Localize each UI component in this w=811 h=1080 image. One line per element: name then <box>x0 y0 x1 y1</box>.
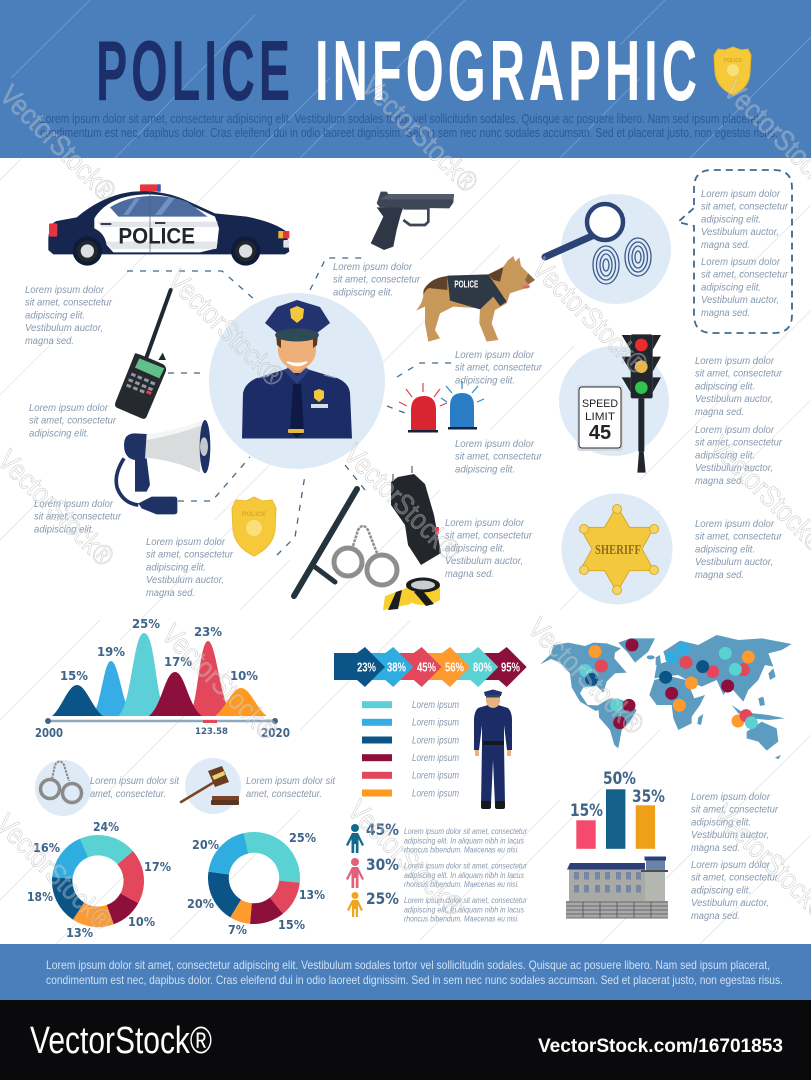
stat: 45 percent: 45% <box>366 820 399 839</box>
stat: 30 percent: rhoncus bibendum. Maecenas eu nisi. <box>404 879 519 889</box>
text: traffic notes: Vestibulum auctor, <box>695 462 773 474</box>
icon: speed limit and traffic light: LIMIT <box>585 411 615 423</box>
icon: sirens <box>399 381 484 432</box>
icon: header gold badge: POLICE <box>724 58 743 64</box>
text: siren top note: sit amet, consectetur <box>455 362 542 374</box>
icon: magnifier and fingerprints <box>545 194 671 304</box>
text: gavel caption: Lorem ipsum dolor sit <box>246 775 336 787</box>
stat: 30 percent: adipiscing elit. In aliquam nibh in lacus <box>404 870 525 880</box>
text: gun note: adipiscing elit. <box>333 286 393 298</box>
text: radio note: sit amet, consectetur <box>29 415 116 427</box>
chart: donut one: 16% <box>33 840 60 855</box>
chart: area peaks timeline: 2000 <box>35 725 63 740</box>
text: gun note: Lorem ipsum dolor <box>333 261 412 273</box>
chart: donut one <box>27 819 171 940</box>
text: radio note <box>29 402 116 439</box>
text: siren bottom note <box>455 438 542 475</box>
text: megaphone note <box>34 498 121 535</box>
chart: area peaks timeline: 123.58 <box>195 727 228 737</box>
title <box>96 24 701 119</box>
text: siren top note <box>455 349 542 386</box>
callout: dashed speech bubble: sit amet, consectetur <box>701 201 788 213</box>
text: taser note: Lorem ipsum dolor <box>445 517 524 529</box>
icon: sheriff star: SHERIFF <box>595 543 641 558</box>
chart: area peaks timeline: 23% <box>194 624 222 639</box>
callout: dashed speech bubble: Lorem ipsum dolor <box>701 256 780 268</box>
legend <box>362 699 459 799</box>
text: siren bottom note: sit amet, consectetur <box>455 451 542 463</box>
text: siren bottom note: Lorem ipsum dolor <box>455 438 534 450</box>
icon: police car: POLICE <box>118 224 195 249</box>
watermark marks: VectorStock® <box>525 252 654 381</box>
text: traffic notes: adipiscing elit. <box>695 380 755 392</box>
connectors <box>127 258 457 555</box>
callout: dashed speech bubble: magna sed. <box>701 307 750 319</box>
chart: percentage arrows: 56% <box>445 660 464 674</box>
legend: Lorem ipsum <box>412 717 459 729</box>
text: traffic notes: sit amet, consectetur <box>695 437 782 449</box>
text: prison notes: Lorem ipsum dolor <box>691 859 770 871</box>
text: prison notes: sit amet, consectetur <box>691 804 778 816</box>
chart: area peaks timeline: 2020 <box>261 725 290 740</box>
text: taser note <box>445 517 532 580</box>
legend: Lorem ipsum <box>412 752 459 764</box>
watermark marks: VectorStock® <box>155 618 284 747</box>
icon: standing officer <box>474 690 512 809</box>
icon: police dog <box>416 256 535 342</box>
text: prison notes: sit amet, consectetur <box>691 872 778 884</box>
text: badge note: adipiscing elit. <box>146 561 206 573</box>
text: prison notes: Vestibulum auctor, <box>691 829 769 841</box>
header text <box>40 112 778 140</box>
chart: percentage arrows: 95% <box>501 660 520 674</box>
icon: gold police badge <box>232 497 276 556</box>
text: siren top note: adipiscing elit. <box>455 374 515 386</box>
icon: caution tape <box>383 578 440 610</box>
legend: Lorem ipsum <box>412 699 459 711</box>
stat: 45 percent: Lorem ipsum dolor sit amet, consectetur <box>404 826 528 836</box>
chart: donut two: 20% <box>187 896 214 911</box>
callout: dashed speech bubble: adipiscing elit. <box>701 281 761 293</box>
chart: donut one: 10% <box>128 914 155 929</box>
text: taser note: sit amet, consectetur <box>445 530 532 542</box>
icon: police car <box>48 184 289 266</box>
chart: donut one: 18% <box>27 889 53 904</box>
text: car note: sit amet, consectetur <box>25 297 112 309</box>
chart: donut two: 20% <box>192 837 219 852</box>
text: sheriff note: Vestibulum auctor, <box>695 556 773 568</box>
chart: donut one: 24% <box>93 819 119 834</box>
callout: dashed speech bubble: sit amet, consectetur <box>701 269 788 281</box>
stat: 45 percent: adipiscing elit. In aliquam nibh in lacus <box>404 835 525 845</box>
icon: police officer portrait <box>209 293 385 469</box>
text: radio note: adipiscing elit. <box>29 427 89 439</box>
watermark marks: VectorStock® <box>355 70 484 199</box>
callout: dashed speech bubble: Vestibulum auctor, <box>701 294 779 306</box>
credit bar <box>0 1000 811 1080</box>
text: prison notes: magna sed. <box>691 842 740 854</box>
text: radio note: Lorem ipsum dolor <box>29 402 108 414</box>
text: badge note: sit amet, consectetur <box>146 549 233 561</box>
text: taser note: adipiscing elit. <box>445 542 505 554</box>
chart: three bars: 35% <box>632 787 665 807</box>
text: gavel caption: amet, consectetur. <box>246 788 322 800</box>
text: car note: Lorem ipsum dolor <box>25 284 104 296</box>
stat: 25 percent: Lorem ipsum dolor sit amet, consectetur <box>404 895 528 905</box>
callout: dashed speech bubble <box>678 170 792 333</box>
chart: area peaks timeline <box>35 616 290 740</box>
text: traffic notes: adipiscing elit. <box>695 449 755 461</box>
text: traffic notes: Lorem ipsum dolor <box>695 424 774 436</box>
chart: donut two: 7% <box>228 922 247 937</box>
text: taser note: Vestibulum auctor, <box>445 555 523 567</box>
text: badge note: magna sed. <box>146 587 195 599</box>
chart: area peaks timeline: 25% <box>132 616 160 631</box>
text: prison notes: magna sed. <box>691 910 740 922</box>
icon: speed limit and traffic light: 45 <box>589 422 611 444</box>
icon: megaphone <box>116 420 210 514</box>
text: car note: adipiscing elit. <box>25 309 85 321</box>
chart: donut two: 13% <box>299 887 325 902</box>
stat: 25 percent: 25% <box>366 889 399 908</box>
title: POLICE <box>96 24 294 119</box>
icon: police radio <box>115 290 171 419</box>
chart: percentage arrows: 38% <box>387 660 406 674</box>
text: prison notes: adipiscing elit. <box>691 816 751 828</box>
text: prison notes: Lorem ipsum dolor <box>691 791 770 803</box>
text: traffic notes <box>695 355 782 487</box>
chart: percentage arrows: 23% <box>357 660 376 674</box>
stat: 30 percent: 30% <box>366 855 399 874</box>
chart: area peaks timeline: 19% <box>97 644 125 659</box>
icon: speed limit and traffic light <box>559 334 669 473</box>
text: handcuffs caption: amet, consectetur. <box>90 788 166 800</box>
text: prison notes: Vestibulum auctor, <box>691 897 769 909</box>
chart: three bars: 15% <box>570 801 603 821</box>
chart: three bars <box>570 769 665 849</box>
text: traffic notes: sit amet, consectetur <box>695 368 782 380</box>
icon: handgun <box>371 192 454 250</box>
text: badge note: Lorem ipsum dolor <box>146 536 225 548</box>
text: siren bottom note: adipiscing elit. <box>455 463 515 475</box>
text: sheriff note: adipiscing elit. <box>695 543 755 555</box>
stat: 30 percent <box>346 855 528 889</box>
watermark marks: VectorStock® <box>341 794 470 923</box>
text: sheriff note: Lorem ipsum dolor <box>695 518 774 530</box>
callout: dashed speech bubble: Vestibulum auctor, <box>701 226 779 238</box>
stat: 30 percent: Lorem ipsum dolor sit amet, consectetur <box>404 861 528 871</box>
icon: police dog: POLICE <box>454 279 479 290</box>
chart: percentage arrows <box>334 647 527 687</box>
text: traffic notes: magna sed. <box>695 475 744 487</box>
text: badge note: Vestibulum auctor, <box>146 574 224 586</box>
credit bar: VectorStock® <box>30 1020 212 1062</box>
callout: dashed speech bubble: magna sed. <box>701 239 750 251</box>
text: sheriff note: sit amet, consectetur <box>695 531 782 543</box>
callout: dashed speech bubble: adipiscing elit. <box>701 213 761 225</box>
chart: area peaks timeline: 17% <box>164 654 192 669</box>
icon: baton <box>294 489 357 596</box>
text: prison notes: adipiscing elit. <box>691 884 751 896</box>
text: gun note: sit amet, consectetur <box>333 274 420 286</box>
text: badge note <box>146 536 233 599</box>
text: handcuffs caption: Lorem ipsum dolor sit <box>90 775 180 787</box>
callout: dashed speech bubble: Lorem ipsum dolor <box>701 188 780 200</box>
text: car note <box>25 284 112 347</box>
text: megaphone note: Lorem ipsum dolor <box>34 498 113 510</box>
text: car note: Vestibulum auctor, <box>25 322 103 334</box>
header band <box>0 0 811 158</box>
text: car note: magna sed. <box>25 335 74 347</box>
watermark marks: VectorStock® <box>337 438 466 567</box>
icon: handcuffs circle <box>35 760 91 816</box>
chart: donut one: 17% <box>144 859 171 874</box>
text: traffic notes: magna sed. <box>695 406 744 418</box>
chart: donut two: 15% <box>278 917 305 932</box>
stat: 45 percent: rhoncus bibendum. Maecenas eu nisi. <box>404 845 519 855</box>
chart: percentage arrows: 80% <box>473 660 492 674</box>
icon: header gold badge <box>714 47 751 95</box>
text: siren top note: Lorem ipsum dolor <box>455 349 534 361</box>
text: megaphone note: adipiscing elit. <box>34 523 94 535</box>
footer band <box>0 944 811 1000</box>
stat: 25 percent: adipiscing elit. In aliquam nibh in lacus <box>404 904 525 914</box>
icon: taser <box>391 466 441 565</box>
watermark marks: VectorStock® <box>161 264 290 393</box>
text: traffic notes: Vestibulum auctor, <box>695 393 773 405</box>
icon: sheriff star <box>562 494 672 604</box>
text: handcuffs caption <box>90 775 180 800</box>
text: prison notes <box>691 791 778 922</box>
icon: gavel circle <box>181 758 241 814</box>
icon: speed limit and traffic light: SPEED <box>582 398 618 410</box>
stat: 45 percent <box>346 820 528 855</box>
legend: Lorem ipsum <box>412 734 459 746</box>
chart: donut one: 13% <box>66 925 93 940</box>
chart: donut two <box>187 828 325 937</box>
chart: percentage arrows: 45% <box>417 660 436 674</box>
text: sheriff note <box>695 518 782 581</box>
chart: area peaks timeline: 10% <box>230 668 258 683</box>
text: sheriff note: magna sed. <box>695 569 744 581</box>
text: taser note: magna sed. <box>445 568 494 580</box>
icon: prison building <box>566 856 668 918</box>
chart: three bars: 50% <box>603 769 636 789</box>
chart: donut two: 25% <box>289 830 316 845</box>
stat: 25 percent: rhoncus bibendum. Maecenas eu nisi. <box>404 914 519 924</box>
icon: gold police badge: POLICE <box>242 511 267 518</box>
watermark marks: VectorStock® <box>521 612 650 741</box>
map: world with markers <box>540 635 792 759</box>
legend: Lorem ipsum <box>412 787 459 799</box>
legend: Lorem ipsum <box>412 770 459 782</box>
stat: 25 percent <box>347 889 528 924</box>
icon: handcuffs <box>334 526 397 585</box>
credit bar: VectorStock.com/16701853 <box>538 1035 783 1057</box>
text: megaphone note: sit amet, consectetur <box>34 511 121 523</box>
text: gavel caption <box>246 775 336 800</box>
text: gun note <box>333 261 420 298</box>
chart: area peaks timeline: 15% <box>60 668 88 683</box>
text: traffic notes: Lorem ipsum dolor <box>695 355 774 367</box>
